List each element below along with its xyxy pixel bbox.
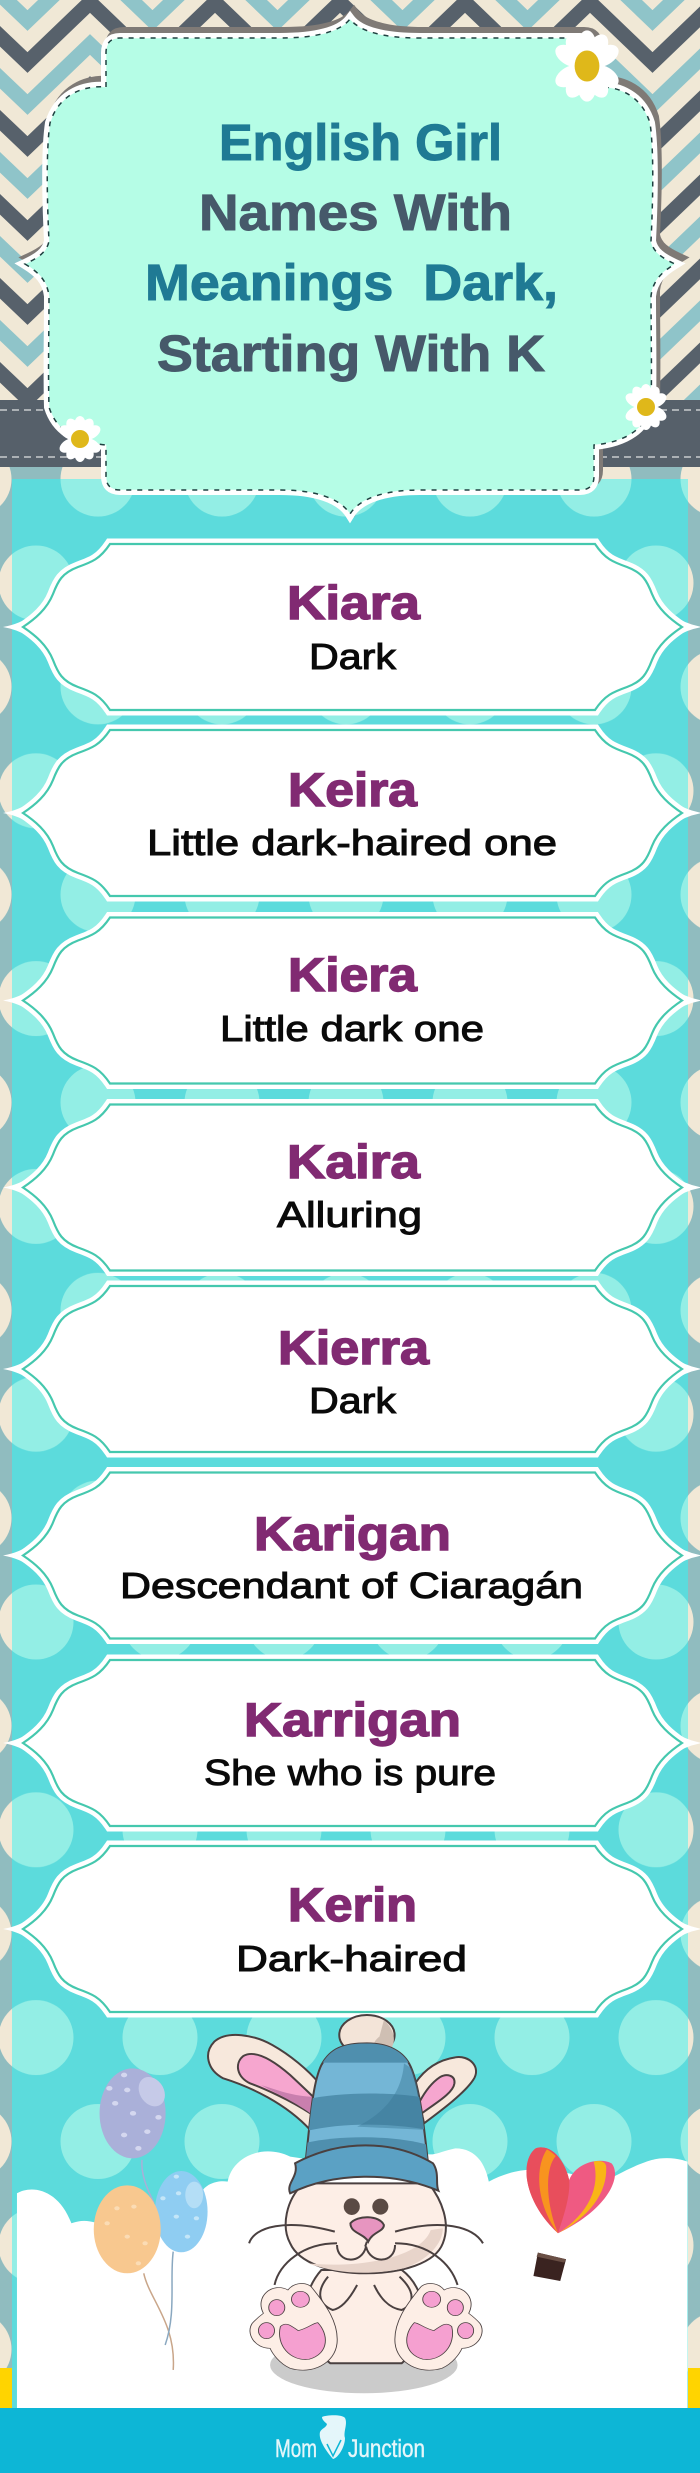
- card: Kiera: [3, 918, 700, 1084]
- card: Kierra: [3, 1286, 700, 1452]
- title: English Girl: [219, 114, 502, 171]
- bunny arms: [320, 2277, 412, 2310]
- card: Kiara: Dark: [309, 636, 397, 677]
- card: Kierra: Dark: [309, 1380, 397, 1421]
- card: Kiara: Kiara: [287, 576, 421, 629]
- card: Kaira: [3, 1104, 700, 1270]
- card: Kiera: Kiera: [288, 948, 418, 1001]
- card: Karrigan: Karrigan: [244, 1693, 461, 1746]
- card: Keira: [3, 730, 700, 896]
- card: Kiera: Little dark one: [220, 1008, 484, 1049]
- card: Kerin: Kerin: [288, 1878, 417, 1931]
- ground shadow: [270, 2337, 458, 2393]
- balloon: blue: [155, 2171, 208, 2252]
- hot air balloon basket: [533, 2253, 566, 2281]
- icon: daisy right: [623, 384, 669, 430]
- card: Karrigan: [3, 1660, 700, 1826]
- title: Names With: [199, 184, 512, 241]
- bunny head: [286, 2183, 446, 2273]
- chevron header background: [0, 0, 700, 482]
- footer bar: [0, 2408, 700, 2473]
- card: Kaira: Kaira: [287, 1135, 421, 1188]
- blue striped hat: [289, 2043, 438, 2193]
- bunny right ear: [415, 2057, 476, 2123]
- card: Karrigan: She who is pure: [204, 1752, 496, 1793]
- icon: daisy left: [57, 416, 103, 462]
- title plaque: [25, 13, 679, 514]
- card: Kaira: Alluring: [277, 1194, 422, 1235]
- logo: Mom: [275, 2435, 317, 2463]
- hat pompom: [339, 2015, 395, 2055]
- grey stitched ribbon band: [0, 400, 700, 467]
- balloon: purple: [100, 2068, 169, 2158]
- card: Keira: Keira: [288, 763, 418, 816]
- bunny body: [304, 2270, 424, 2363]
- card: Keira: Little dark-haired one: [147, 822, 557, 863]
- logo: Junction: [348, 2435, 425, 2463]
- card: Karigan: Descendant of Ciaragán: [120, 1565, 583, 1606]
- card: Karigan: [3, 1472, 700, 1638]
- card: Karigan: Karigan: [254, 1507, 451, 1560]
- bunny left foot: [250, 2283, 337, 2370]
- side stripes: [0, 467, 700, 2408]
- balloon: orange: [94, 2185, 161, 2273]
- balloon strings: [142, 2160, 173, 2370]
- logo: [275, 2415, 425, 2463]
- bunny left ear: [208, 2035, 319, 2130]
- hot air heart balloon: [526, 2147, 615, 2233]
- bunny right foot: [395, 2283, 482, 2370]
- bunny nose and mouth: [337, 2217, 395, 2260]
- card: Kiara: [3, 544, 700, 710]
- card: Kerin: Dark-haired: [236, 1938, 467, 1979]
- bunny whiskers: [249, 2225, 483, 2285]
- title: [145, 114, 558, 382]
- card: Kierra: Kierra: [278, 1321, 430, 1374]
- white clouds: [17, 2148, 687, 2410]
- bottom illustration: [17, 2015, 687, 2410]
- bunny eyes: [344, 2198, 388, 2215]
- title: Starting With K: [157, 325, 545, 382]
- title: Meanings Dark,: [145, 254, 558, 311]
- icon: daisy top right: [551, 30, 623, 102]
- card: Kerin: [3, 1846, 700, 2012]
